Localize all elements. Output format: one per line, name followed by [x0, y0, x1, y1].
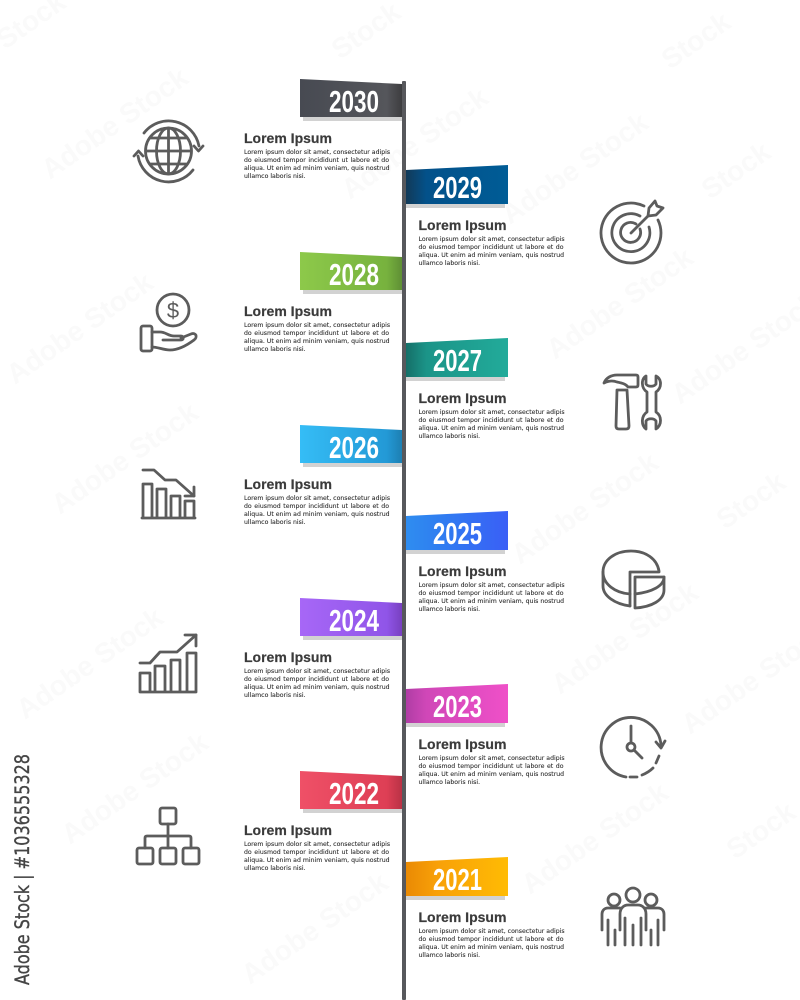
text: Adobe Stock	[546, 576, 704, 700]
text block: 2024	[244, 649, 390, 699]
text block: 2027	[418, 390, 565, 440]
text block: 2029: ullamco laboris nisi.	[418, 260, 480, 267]
text block: 2024: aliqua. Ut enim ad minim veniam, quis nostrud	[244, 684, 390, 691]
flag: 2029	[406, 165, 508, 208]
text block: 2029: Lorem Ipsum	[418, 217, 506, 233]
text: Stock	[696, 136, 776, 205]
text block: 2021: do eiusmod tempor incididunt ut labore et do	[418, 936, 564, 943]
flag: 2030	[300, 79, 402, 121]
text block: 2027: do eiusmod tempor incididunt ut labore et do	[418, 417, 564, 424]
flag: 2028: 2028	[329, 257, 379, 292]
text block: 2028: do eiusmod tempor incididunt ut labore et do	[244, 330, 389, 337]
text: Adobe Stock	[541, 241, 699, 365]
flag: 2022: 2022	[329, 776, 379, 811]
text block: 2030: Lorem Ipsum	[244, 130, 332, 146]
text block: 2025: do eiusmod tempor incididunt ut labore et do	[418, 590, 564, 597]
text block: 2023: Lorem Ipsum	[418, 736, 506, 752]
text: Adobe Stock	[516, 776, 674, 900]
flag: 2023: 2023	[433, 689, 482, 724]
text block: 2021: aliqua. Ut enim ad minim veniam, quis nostrud	[418, 944, 564, 951]
flag: 2025	[406, 511, 508, 554]
text: Adobe Stock	[506, 446, 664, 570]
text block: 2026: Lorem Ipsum	[244, 476, 332, 492]
text block: 2021	[418, 909, 565, 959]
flag: 2021: 2021	[433, 862, 482, 897]
text block: 2021: Lorem ipsum dolor sit amet, consectetur adipis	[418, 928, 565, 935]
text block: 2024: ullamco laboris nisi.	[244, 692, 306, 699]
text block: 2026: aliqua. Ut enim ad minim veniam, quis nostrud	[244, 511, 390, 518]
text block: 2028: Lorem ipsum dolor sit amet, consectetur adipis	[244, 322, 390, 329]
text: Adobe Stock	[56, 726, 214, 850]
icon: pie chart with wedge	[603, 551, 664, 608]
text block: 2023: ullamco laboris nisi.	[418, 779, 480, 786]
flag: 2021	[406, 857, 508, 900]
flag: 2024	[300, 598, 402, 640]
flag: 2026	[300, 425, 402, 467]
text block: 2029	[418, 217, 565, 267]
text block: 2026: do eiusmod tempor incididunt ut labore et do	[244, 503, 389, 510]
text block: 2026: Lorem ipsum dolor sit amet, consectetur adipis	[244, 495, 390, 502]
text block: 2025	[418, 563, 565, 613]
flag: 2030: 2030	[329, 84, 379, 119]
text block: 2022: aliqua. Ut enim ad minim veniam, quis nostrud	[244, 857, 390, 864]
icon: organisation chart	[137, 808, 199, 864]
flag: 2026: 2026	[329, 430, 379, 465]
text block: 2030: aliqua. Ut enim ad minim veniam, quis nostrud	[244, 165, 390, 172]
flag: 2025: 2025	[433, 516, 482, 551]
flag: 2022	[300, 771, 402, 813]
text block: 2022: Lorem ipsum dolor sit amet, consectetur adipis	[244, 841, 390, 848]
text block: 2030: do eiusmod tempor incididunt ut labore et do	[244, 157, 389, 164]
text block: 2027: aliqua. Ut enim ad minim veniam, quis nostrud	[418, 425, 564, 432]
text: Adobe Stock	[46, 396, 204, 520]
text block: 2029: Lorem ipsum dolor sit amet, consectetur adipis	[418, 236, 565, 243]
text block: 2023: aliqua. Ut enim ad minim veniam, quis nostrud	[418, 771, 564, 778]
icon: target with arrow	[601, 201, 663, 263]
text block: 2025: Lorem Ipsum	[418, 563, 506, 579]
text block: 2028: aliqua. Ut enim ad minim veniam, quis nostrud	[244, 338, 390, 345]
text block: 2027: Lorem ipsum dolor sit amet, consectetur adipis	[418, 409, 565, 416]
flag: 2027	[406, 338, 508, 381]
text block: 2025: Lorem ipsum dolor sit amet, consectetur adipis	[418, 582, 565, 589]
text block: 2025: ullamco laboris nisi.	[418, 606, 480, 613]
icon: hammer and wrench	[604, 375, 660, 429]
text block: 2021: ullamco laboris nisi.	[418, 952, 480, 959]
icon: globe with rotating arrows	[134, 121, 203, 182]
text: Adobe Stock	[1, 266, 159, 390]
text: Stock	[656, 6, 736, 75]
timeline pole	[402, 81, 406, 1000]
text block: 2024: Lorem Ipsum	[244, 649, 332, 665]
flag: 2029: 2029	[433, 170, 482, 205]
icon: group of people	[602, 888, 664, 945]
text block: 2027: Lorem Ipsum	[418, 390, 506, 406]
icon: hand holding coin: $	[167, 298, 179, 323]
icon: hand holding coin	[141, 294, 196, 351]
flag: 2027: 2027	[433, 343, 482, 378]
text: Adobe Stock	[11, 601, 169, 725]
flag: 2024: 2024	[329, 603, 380, 638]
text block: 2027: ullamco laboris nisi.	[418, 433, 480, 440]
text block: 2024: do eiusmod tempor incididunt ut labore et do	[244, 676, 389, 683]
flag: 2023	[406, 684, 508, 727]
icon: clock with dashed arrow	[601, 717, 665, 777]
text block: 2029: aliqua. Ut enim ad minim veniam, quis nostrud	[418, 252, 564, 259]
text: Adobe Stock	[236, 866, 394, 990]
text block: 2022: Lorem Ipsum	[244, 822, 332, 838]
text block: 2026	[244, 476, 390, 526]
text: Stock	[721, 796, 800, 865]
text block: 2026: ullamco laboris nisi.	[244, 519, 306, 526]
text block: 2023	[418, 736, 565, 786]
text: Stock	[711, 466, 791, 535]
icon: falling bar chart	[142, 470, 195, 518]
flag: 2028	[300, 252, 402, 294]
text block: 2030: ullamco laboris nisi.	[244, 173, 306, 180]
text block: 2028: Lorem Ipsum	[244, 303, 332, 319]
text block: 2022: do eiusmod tempor incididunt ut labore et do	[244, 849, 389, 856]
text: Adobe Stock	[496, 106, 654, 230]
text block: 2028	[244, 303, 390, 353]
text block: 2030	[244, 130, 390, 180]
text block: 2030: Lorem ipsum dolor sit amet, consectetur adipis	[244, 149, 390, 156]
stock watermark caption: Adobe Stock | #1036555328	[11, 754, 34, 985]
text: Adobe Stock	[36, 61, 194, 185]
text block: 2023: Lorem ipsum dolor sit amet, consectetur adipis	[418, 755, 565, 762]
text block: 2024: Lorem ipsum dolor sit amet, consectetur adipis	[244, 668, 390, 675]
text block: 2023: do eiusmod tempor incididunt ut labore et do	[418, 763, 564, 770]
text block: 2029: do eiusmod tempor incididunt ut labore et do	[418, 244, 564, 251]
icon: rising bar chart	[140, 635, 196, 692]
text block: 2028: ullamco laboris nisi.	[244, 346, 306, 353]
text block: 2022	[244, 822, 390, 872]
text: Adobe Stock	[336, 81, 494, 205]
text block: 2025: aliqua. Ut enim ad minim veniam, quis nostrud	[418, 598, 564, 605]
text block: 2021: Lorem Ipsum	[418, 909, 506, 925]
text block: 2022: ullamco laboris nisi.	[244, 865, 306, 872]
